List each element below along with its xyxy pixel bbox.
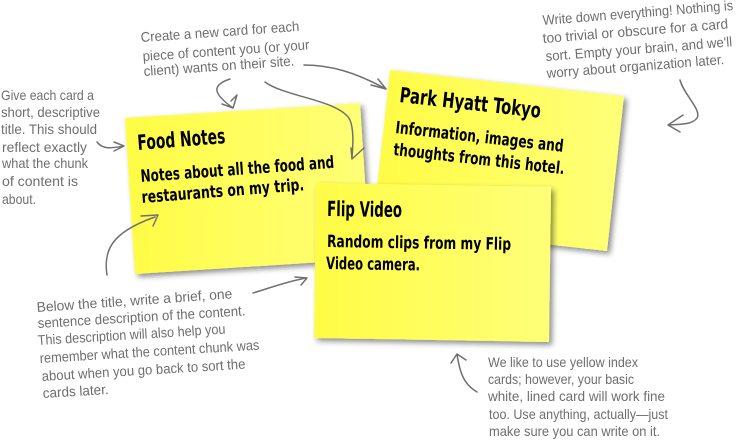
note: give each card a title: title. This should [1, 121, 97, 137]
note: write down everything [542, 0, 734, 81]
note: below the title: This description will also help you [37, 321, 226, 348]
card: Park Hyatt Tokyo [373, 70, 624, 251]
note: give each card a title: of content is [2, 173, 78, 189]
card title: Park Hyatt Tokyo: Park Hyatt Tokyo [398, 83, 542, 123]
arrow: create note to Flip Video card [265, 82, 364, 159]
note: yellow index cards: cards; however, your basic [488, 371, 634, 387]
note: give each card a title: reflect exactly [2, 139, 87, 155]
card description: Park Hyatt Tokyo: Information, images and [394, 118, 565, 157]
note: below the title: about when you go back to sort the [41, 356, 246, 384]
card: Flip Video [314, 183, 551, 342]
card title: Food Notes: Food Notes [137, 124, 226, 155]
note: below the title: remember what the content chunk was [39, 337, 260, 366]
note: give each card a title [1, 87, 100, 207]
card description: Food Notes [140, 153, 335, 208]
note: yellow index cards [487, 354, 668, 439]
note: write down everything: worry about organization later. [545, 51, 725, 81]
note: create a new card: piece of content you (or your [142, 36, 310, 64]
note: below the title: sentence description of the content. [37, 302, 246, 331]
card description: Park Hyatt Tokyo [392, 118, 566, 179]
arrow: index card note to Flip Video card [451, 354, 477, 392]
arrow: create note to Park Hyatt card [304, 65, 386, 89]
card description: Flip Video [326, 232, 511, 275]
note: create a new card: client) wants on their site. [143, 52, 295, 79]
card description: Food Notes: restaurants on my trip. [141, 175, 305, 208]
note: yellow index cards: too. Use anything, actually—just [489, 406, 668, 422]
arrow: below note to Flip Video card [253, 277, 307, 293]
note: yellow index cards: We like to use yellow index [488, 354, 638, 370]
card description: Flip Video: Video camera. [326, 254, 420, 275]
note: below the title: Below the title, write a brief, one [36, 285, 233, 315]
note: create a new card: Create a new card for each [140, 18, 300, 45]
card description: Food Notes: Notes about all the food and [140, 153, 335, 187]
arrow: title note to card title [97, 142, 124, 151]
note: write down everything: too trivial or obscure for a card [542, 15, 729, 46]
arrow: below note to Food Notes description [106, 215, 158, 275]
note: give each card a title: what the chunk [1, 155, 89, 171]
note: yellow index cards: white, lined card will work fine [487, 388, 665, 404]
note: below the title: cards later. [42, 381, 109, 401]
card: Food Notes [125, 103, 370, 274]
note: create a new card [140, 18, 310, 79]
card title: Flip Video: Flip Video [327, 197, 402, 222]
note: yellow index cards: make sure you can write on it. [489, 423, 660, 439]
card description: Park Hyatt Tokyo: thoughts from this hotel. [392, 140, 566, 179]
note: give each card a title: short, descriptive [1, 104, 100, 120]
note: below the title [36, 285, 260, 401]
note: give each card a title: Give each card a [1, 87, 94, 103]
note: give each card a title: about. [2, 191, 36, 207]
arrow: write down note [668, 80, 698, 132]
card description: Flip Video: Random clips from my Flip [327, 232, 511, 255]
arrow: create note to Food Notes card [217, 79, 237, 108]
